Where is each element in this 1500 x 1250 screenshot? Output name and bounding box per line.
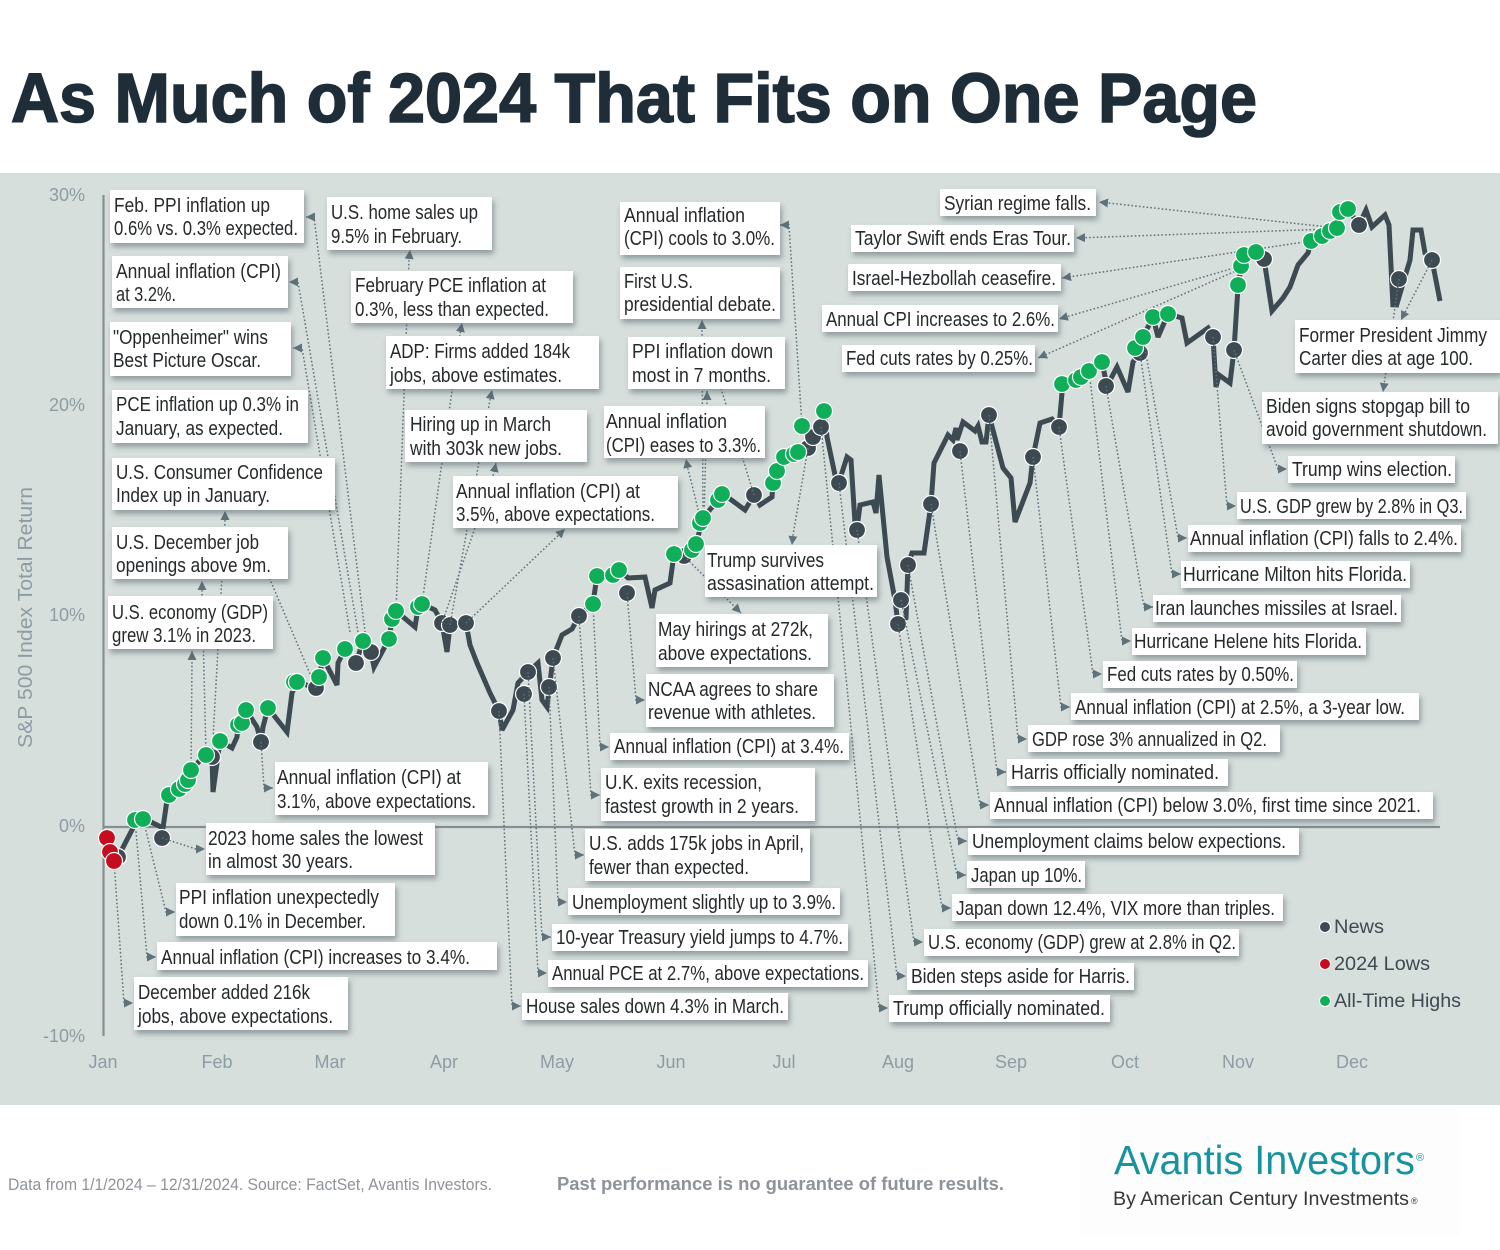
x axis month labels: Sep: [995, 1052, 1027, 1072]
leader: CPI 2.6: [1059, 266, 1241, 319]
callout: NCAA: revenue with athletes.: [648, 702, 816, 724]
callout: CPI cools: Annual inflation: [624, 205, 745, 227]
leader lines: [114, 202, 1432, 1008]
y axis labels: [43, 185, 85, 1046]
leader: Harris: [960, 451, 1006, 772]
callout: PPI down: [628, 337, 785, 389]
callout: Hiring in March: Hiring up in March: [410, 414, 551, 436]
leader: Oppenheimer: [293, 348, 350, 632]
callout: Trump survives: assasination attempt.: [707, 573, 874, 595]
leader: CPI 3.5: [466, 529, 565, 623]
leader: Japan up: [901, 600, 966, 875]
leader: NCAA: [627, 593, 645, 700]
callout: PPI down: PPI inflation down: [632, 341, 773, 363]
leader: GDP 3%: [989, 415, 1027, 739]
logo: Avantis Investors: ®: [1411, 1196, 1418, 1206]
leader: Iran: [1106, 386, 1153, 607]
callout: Feb PPI: [110, 190, 304, 243]
legend: All-Time Highs: All-Time Highs: [1334, 991, 1461, 1012]
leader: PCE January: [266, 570, 316, 688]
callout: debate: presidential debate.: [624, 294, 776, 316]
y axis labels: 10%: [49, 605, 85, 625]
leader: GDP 2.8: [857, 530, 923, 942]
callout: Consumer Confidence: Index up in January.: [116, 485, 270, 507]
x axis month labels: Jun: [656, 1052, 686, 1072]
callout: May hirings: May hirings at 272k,: [658, 619, 813, 641]
callout: CPI eases: Annual inflation: [606, 411, 727, 433]
x axis month labels: May: [540, 1052, 574, 1072]
callout: 2023 home sales: in almost 30 years.: [208, 851, 353, 873]
callout: CPI increases 3.4: Annual inflation (CPI) increases to 3.4%.: [161, 947, 470, 969]
callout: CPI 2.5: Annual inflation (CPI) at 2.5%, a 3-year low.: [1075, 697, 1405, 719]
callout: Fed 0.50: Fed cuts rates by 0.50%.: [1107, 664, 1294, 686]
callout: Iran: Iran launches missiles at Israel.: [1155, 598, 1398, 620]
callout: CPI below 3: Annual inflation (CPI) below 3.0%, first time since 2021.: [994, 795, 1421, 817]
axes: [103, 195, 1440, 1036]
leader: CPI eases: [686, 459, 702, 525]
callout: NCAA: NCAA agrees to share: [648, 679, 818, 701]
callout: CPI 3.1: [275, 762, 488, 815]
callout: CPI 3.4 March: Annual inflation (CPI) at 3.4%.: [614, 736, 844, 758]
leader: CPI cools: [780, 225, 802, 426]
callout: May hirings: [656, 614, 828, 667]
leader: claims: [908, 565, 967, 841]
leader: Trump wins: [1234, 350, 1287, 469]
x axis month labels: [88, 1052, 1368, 1072]
callout: PCE January: January, as expected.: [116, 418, 283, 440]
footer: disclaimer: Past performance is no guarantee of future results.: [557, 1174, 1004, 1194]
callout: NCAA: [646, 674, 834, 727]
callout: CPI eases: [604, 406, 765, 458]
callout: CPI cools: (CPI) cools to 3.0%.: [624, 228, 775, 250]
callout: 2023 home sales: [206, 823, 435, 875]
callout: February PCE: February PCE inflation at: [355, 275, 546, 297]
leader: December 216k: [114, 861, 133, 1003]
callout: claims: Unemployment claims below expections.: [972, 831, 1286, 853]
leader: December job openings: [202, 581, 206, 755]
leader: GDP 2023: [191, 651, 192, 770]
callout: Hiring in March: [405, 410, 587, 462]
leader: 175k jobs: [553, 658, 584, 855]
legend: 2024 Lows: 2024 Lows: [1334, 954, 1430, 975]
callout: Consumer Confidence: U.S. Consumer Confidence: [116, 462, 323, 484]
callout: February PCE: 0.3%, less than expected.: [355, 299, 549, 321]
leader: Milton: [1140, 353, 1181, 574]
callout: Trump wins: Trump wins election.: [1292, 459, 1452, 481]
leader: Syrian regime: [1099, 202, 1337, 228]
2024 low markers: [98, 830, 122, 870]
callout: UK recession: fastest growth in 2 years.: [605, 796, 799, 818]
callout: UK recession: U.K. exits recession,: [605, 772, 762, 794]
leader: Hiring in March: [442, 463, 496, 623]
x axis month labels: Nov: [1222, 1052, 1254, 1072]
x axis month labels: Feb: [201, 1052, 233, 1072]
leader: CPI 3.1: [261, 742, 273, 788]
callout: CPI 3.5: [453, 476, 678, 528]
callout: CPI 3.1: 3.1%, above expectations.: [277, 791, 476, 813]
callout: CPI eases: (CPI) eases to 3.3%.: [606, 435, 761, 457]
logo: Avantis Investors: ®: [1416, 1152, 1424, 1164]
callout: February PCE: [351, 271, 573, 323]
callout: CPI cools: [620, 202, 780, 255]
leader: Unemployment 3.9: [549, 687, 567, 902]
leader: 10-year: [528, 672, 551, 937]
callout: Carter: [1295, 320, 1500, 373]
callout: 10-year: 10-year Treasury yield jumps to 4.7%.: [556, 927, 843, 949]
callout: 175k jobs: [585, 829, 810, 881]
leader: GDP Q3: [1213, 337, 1236, 506]
callout: Unemployment 3.9: Unemployment slightly up to 3.9%.: [572, 892, 836, 914]
callout: House sales: House sales down 4.3% in March.: [526, 996, 784, 1018]
x axis month labels: Apr: [430, 1052, 458, 1072]
callout: CPI 3.5: 3.5%, above expectations.: [456, 504, 655, 526]
leader: CPI 2.4: [1143, 337, 1187, 538]
callout: GDP 3%: GDP rose 3% annualized in Q2.: [1032, 729, 1267, 751]
callout: Oppenheimer: "Oppenheimer" wins: [113, 327, 268, 349]
callout: Trump survives: [705, 545, 877, 597]
callout: job openings: [112, 527, 288, 579]
leader: Biden aside: [839, 483, 906, 976]
x axis month labels: Mar: [314, 1052, 346, 1072]
leader: home sales February: [396, 250, 410, 611]
x axis month labels: Dec: [1336, 1052, 1368, 1072]
x axis month labels: Jul: [772, 1052, 796, 1072]
callout: home sales February: [327, 197, 492, 250]
callout: Trump survives: Trump survives: [707, 550, 824, 572]
callout: CPI 3.2: [112, 256, 288, 308]
leader: Trump nominated: [821, 427, 888, 1008]
logo: Avantis Investors: [1080, 1110, 1460, 1235]
callout: Hiring in March: with 303k new jobs.: [409, 438, 562, 460]
callout: PPI down: most in 7 months.: [632, 365, 771, 387]
callout: 175k jobs: U.S. adds 175k jobs in April,: [589, 833, 804, 855]
callout: Consumer Confidence: [112, 458, 335, 510]
leader: CPI 3.2: [289, 282, 358, 632]
leader: PCE 2.7: [524, 694, 547, 973]
callout: GDP 2023: U.S. economy (GDP): [112, 602, 268, 624]
footer: source note: Data from 1/1/2024 – 12/31/2024. Source: FactSet, Avantis Investors.: [8, 1175, 492, 1194]
callout: CPI 3.1: Annual inflation (CPI) at: [277, 767, 461, 789]
callout: Carter: Carter dies at age 100.: [1299, 348, 1473, 370]
callout: May hirings: above expectations.: [658, 643, 812, 665]
leader: Japan down: [898, 624, 951, 908]
leader: 2023 home sales: [162, 838, 205, 849]
leader: CPI below 3: [931, 504, 989, 805]
leader: PPI down: [720, 385, 754, 495]
callout: job openings: openings above 9m.: [116, 555, 271, 577]
leader: UK recession: [579, 616, 600, 795]
callout: debate: [620, 267, 780, 319]
callout: Japan up: Japan up 10%.: [971, 865, 1082, 887]
leader: PPI December: [143, 819, 175, 912]
callout: Biden aside: Biden steps aside for Harris.: [911, 966, 1130, 988]
callout: Milton: Hurricane Milton hits Florida.: [1183, 564, 1407, 586]
callout: GDP 2.8: [924, 929, 1239, 956]
callout: PPI December: [176, 883, 395, 936]
callout: ADP: [386, 336, 599, 389]
callout: PPI December: PPI inflation unexpectedly: [179, 887, 379, 909]
callout: PPI December: down 0.1% in December.: [179, 911, 366, 933]
x axis month labels: Aug: [882, 1052, 914, 1072]
callout: Syrian regime: Syrian regime falls.: [944, 193, 1091, 215]
leader: Helene: [1089, 371, 1131, 641]
logo: Avantis Investors: By American Century Investments: [1113, 1189, 1409, 1210]
leader: Carter: [1401, 260, 1432, 320]
y axis labels: 30%: [49, 185, 85, 205]
callout: Oppenheimer: Best Picture Oscar.: [113, 350, 261, 372]
callout: debate: First U.S.: [624, 271, 693, 293]
leader: ADP: [450, 390, 492, 625]
callout: Biden stopgap: Biden signs stopgap bill to: [1266, 396, 1470, 418]
leader: Fed 0.25: [1038, 270, 1238, 358]
callout: CPI 2.6: Annual CPI increases to 2.6%.: [826, 309, 1055, 331]
callout: 2023 home sales: 2023 home sales the lowest: [208, 828, 423, 850]
leader: House sales: [499, 711, 521, 1006]
all-time high markers: [126, 200, 1356, 828]
callout: Feb PPI: Feb. PPI inflation up: [114, 195, 270, 217]
leader: May hirings: [684, 556, 741, 613]
callout: PCE January: PCE inflation up 0.3% in: [116, 394, 299, 416]
leader: CPI increases 3.4: [135, 820, 156, 957]
legend: News: News: [1334, 917, 1384, 938]
callout: home sales February: 9.5% in February.: [331, 226, 462, 248]
news markers: [110, 216, 1440, 866]
leader: Biden stopgap: [1383, 279, 1399, 392]
callouts: [108, 189, 1500, 1030]
leader: CPI 2.5: [1033, 457, 1070, 707]
leader: Fed 0.50: [1059, 427, 1102, 674]
callout: Helene: Hurricane Helene hits Florida.: [1134, 631, 1362, 653]
callout: UK recession: [601, 768, 815, 821]
y axis labels: 20%: [49, 395, 85, 415]
callout: ADP: ADP: Firms added 184k: [390, 341, 571, 363]
callout: December 216k: jobs, above expectations.: [137, 1006, 333, 1028]
callout: Taylor Swift: Taylor Swift ends Eras Tour.: [855, 228, 1071, 250]
leader: debate: [702, 320, 703, 518]
callout: Biden stopgap: [1262, 392, 1498, 444]
y axis labels: -10%: [43, 1026, 85, 1046]
callout: CPI 3.5: Annual inflation (CPI) at: [456, 481, 640, 503]
callout: CPI 2.4: Annual inflation (CPI) falls to 2.4%.: [1190, 528, 1458, 550]
callout: Trump nominated: Trump officially nominated.: [893, 998, 1105, 1020]
x axis month labels: Jan: [88, 1052, 118, 1072]
title: As Much of 2024 That Fits on One Page: [11, 59, 1257, 137]
callout: Oppenheimer: [110, 322, 291, 376]
legend: [1320, 917, 1461, 1012]
callout: Israel-Hezbollah: Israel-Hezbollah ceasefire.: [852, 268, 1056, 290]
callout: ADP: jobs, above estimates.: [389, 365, 562, 387]
leader: Trump survives: [792, 448, 808, 545]
callout: GDP 2023: grew 3.1% in 2023.: [112, 625, 256, 647]
leader: Taylor Swift: [1076, 229, 1330, 238]
callout: Harris: Harris officially nominated.: [1011, 762, 1219, 784]
y axis labels: 0%: [59, 816, 85, 836]
callout: 175k jobs: fewer than expected.: [589, 857, 749, 879]
callout: home sales February: U.S. home sales up: [331, 202, 478, 224]
logo: Avantis Investors: Avantis Investors: [1114, 1137, 1415, 1183]
callout: Japan up: [967, 861, 1085, 888]
leader: Israel-Hezbollah: [1062, 241, 1311, 278]
leader: Feb PPI: [306, 217, 366, 640]
leader: February PCE: [422, 323, 462, 604]
callout: job openings: U.S. December job: [116, 532, 259, 554]
callout: December 216k: [134, 977, 348, 1030]
callout: PCE 2.7: Annual PCE at 2.7%, above expectations.: [552, 963, 864, 985]
callout: PCE January: [112, 390, 308, 443]
callout: Fed 0.25: Fed cuts rates by 0.25%.: [846, 348, 1033, 370]
callout: Feb PPI: 0.6% vs. 0.3% expected.: [114, 218, 298, 240]
y axis title: S&P 500 Index Total Return: [15, 487, 37, 748]
callout: CPI 3.2: at 3.2%.: [116, 284, 176, 306]
callout: December 216k: December added 216k: [138, 982, 311, 1004]
callout: Japan down: Japan down 12.4%, VIX more than triples.: [956, 898, 1275, 920]
callout: GDP 2.8: U.S. economy (GDP) grew at 2.8% in Q2.: [928, 932, 1236, 954]
x axis month labels: Oct: [1111, 1052, 1139, 1072]
leader: PPI down arrow: [704, 391, 707, 518]
panel: chart background: [0, 173, 1500, 1105]
callout: GDP 2023: [108, 596, 273, 649]
callout: CPI 3.2: Annual inflation (CPI): [116, 261, 281, 283]
leader: Consumer Confidence: [212, 511, 225, 757]
leader: CPI 3.4: [593, 604, 609, 747]
line chart: S&P 500 total return: [107, 209, 1440, 861]
